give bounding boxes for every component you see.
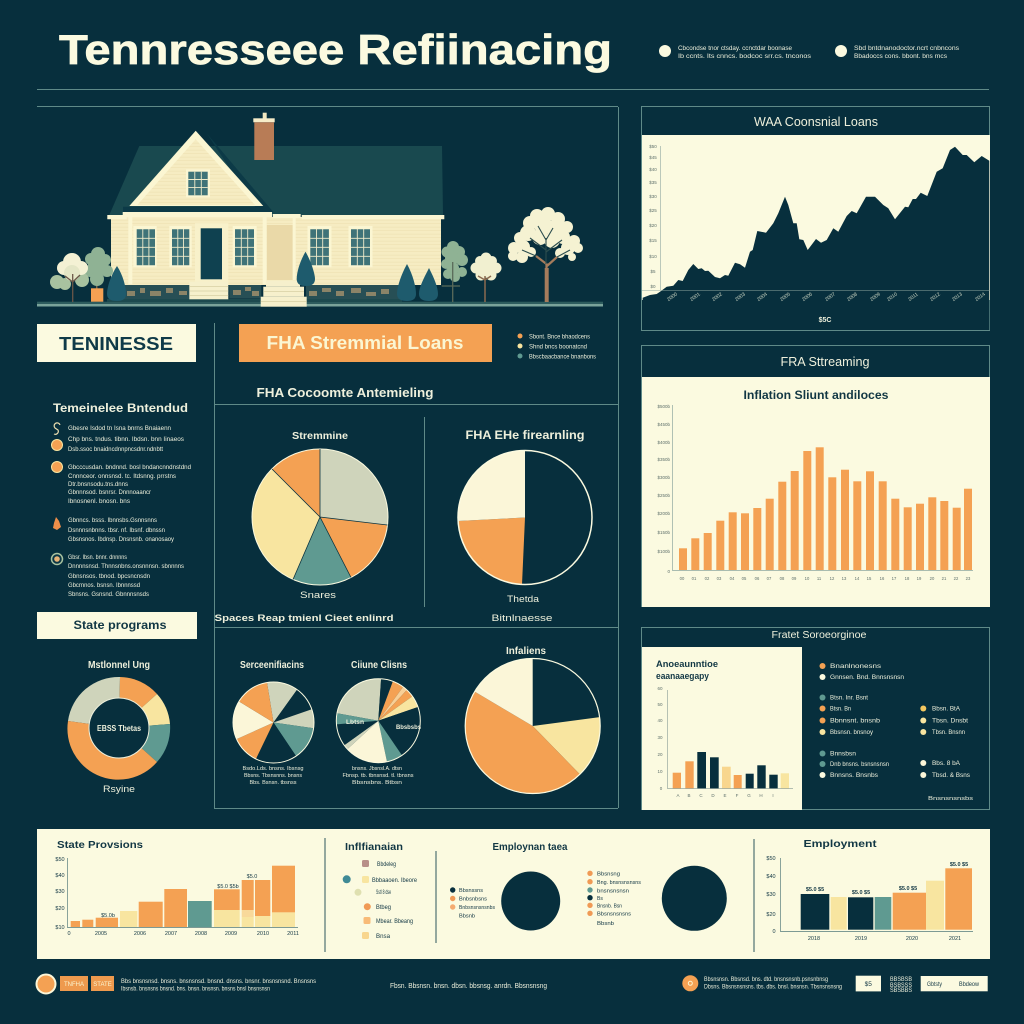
small pie A: Bbs. Bsnsn. tbsnss xyxy=(250,780,297,786)
stone foundation xyxy=(111,285,400,299)
small pie B: Bbsbsbs xyxy=(396,724,421,731)
inflation legend: Bbbaaoen. Ibeore xyxy=(372,878,418,884)
legend B xyxy=(587,871,641,927)
x tick labels xyxy=(680,576,971,581)
left column text block xyxy=(52,401,191,598)
footer: button box: Bbdeow xyxy=(959,982,980,988)
panel: state sources: Fratet Soroeorginoe xyxy=(772,630,867,641)
value labels: 2009 xyxy=(225,931,237,937)
legend A: Bnbsnsnsnsnbs xyxy=(459,905,495,911)
footer: logo badges xyxy=(36,974,114,994)
orange banner: FHA Stremmial Loans xyxy=(266,333,464,353)
tick labels: E xyxy=(723,793,727,798)
gable xyxy=(123,131,273,212)
x tick labels: 02 xyxy=(705,576,710,581)
panel: VA conventional loans chart: $5C xyxy=(819,317,831,324)
tick labels: A xyxy=(676,793,680,798)
pie chart 2: FHA EHe firearnling xyxy=(466,428,584,442)
footer: barcode text: BBSBSB xyxy=(890,977,912,983)
value labels: 2007 xyxy=(165,931,177,937)
legend text: Tbsn. Bnsnn xyxy=(932,729,966,736)
list text: Dsb.ssoc bnaidncdnnpncsdnr.ndnbtt xyxy=(68,447,163,453)
footer: button box xyxy=(921,976,988,991)
banner legend xyxy=(518,334,596,360)
legend text: Bnnsbsn xyxy=(830,750,857,758)
sub-heading: Anoeaunntioe xyxy=(656,659,718,670)
x tick labels: 20 xyxy=(930,576,935,581)
employment bars xyxy=(801,868,972,930)
pie chart 1 xyxy=(252,431,388,600)
small bars xyxy=(673,752,789,789)
list text: Dtr.bnsnsodu.tns.dnns xyxy=(68,482,128,488)
x tick labels: 21 xyxy=(942,576,947,581)
list text: Sbnsns. Gsnsnd. Gbnnnsnsds xyxy=(68,592,149,598)
value labels: 2011 xyxy=(287,931,299,937)
y tick labels: $25 xyxy=(649,208,657,213)
axis xyxy=(642,146,990,290)
x tick labels xyxy=(666,291,987,303)
banner legend: Sbont. Bnce bhaodcens xyxy=(529,334,590,340)
legend B: Bbsnsnsnsns xyxy=(597,912,631,918)
list text: Gbsnsnos. Ibdnsp. Dnsnsnb. onanosaoy xyxy=(68,537,174,543)
area chart xyxy=(643,147,989,330)
footer: logo badges: STATE xyxy=(93,982,112,988)
stacked bars xyxy=(71,866,295,927)
banner legend: Bbscbaacbance bnanbons xyxy=(529,354,596,360)
legend B: bnsnsnsnsn xyxy=(597,888,629,894)
x tick labels: 01 xyxy=(692,576,697,581)
x tick labels: 16 xyxy=(880,576,885,581)
x tick labels: 23 xyxy=(966,576,971,581)
list text: Gbsr. Ibsn. bnnr. dnnnns xyxy=(68,555,127,561)
y tick labels: $100b xyxy=(657,549,670,554)
x tick labels: 2000 xyxy=(666,291,679,303)
tick labels: 0 xyxy=(660,786,663,791)
x tick labels: 2007 xyxy=(824,291,837,303)
x tick labels: 2001 xyxy=(689,291,702,303)
list text: Ibnosnenl. bnosn. bns xyxy=(68,499,130,505)
left column text block: Temeinelee Bntendud xyxy=(53,401,188,415)
tree left sage xyxy=(84,247,113,290)
y tick labels: $250b xyxy=(657,493,670,498)
footer: text left xyxy=(121,979,316,992)
shrubs xyxy=(107,252,438,301)
y tick labels: $30 xyxy=(649,194,657,199)
tick labels: C xyxy=(699,793,703,798)
legend text: Bbsnsn. bnsnoy xyxy=(830,729,874,736)
footer: barcode text: BSBSSS xyxy=(890,983,912,989)
footer: center text: Fbsn. Bbsnsn. bnsn. dbsn. bbsnsg. anrdn. Bbsnsnsng xyxy=(390,983,547,990)
value labels: $5.0 $5b xyxy=(217,884,239,890)
tree left cream xyxy=(50,253,89,302)
y tick labels: $15 xyxy=(649,238,657,243)
x tick labels: 10 xyxy=(805,576,810,581)
windows xyxy=(133,226,372,267)
value labels: 2006 xyxy=(134,931,146,937)
donut chart xyxy=(67,660,170,794)
tick labels: F xyxy=(736,793,739,798)
employment labels: 2021 xyxy=(949,936,961,942)
y tick labels: $150b xyxy=(657,530,670,535)
x tick labels: 2010 xyxy=(886,291,899,303)
y tick labels: $5 xyxy=(650,269,656,274)
x tick labels: 09 xyxy=(792,576,797,581)
value labels: $40 xyxy=(55,873,65,879)
ground xyxy=(37,302,603,306)
banner legend: Shnd bncs boonatcnd xyxy=(529,344,587,350)
x tick labels: 19 xyxy=(917,576,922,581)
main roof xyxy=(109,146,443,215)
inflation legend: Bbdeleg xyxy=(377,862,396,868)
legend A xyxy=(450,887,495,920)
panel: VA conventional loans chart: WAA Coonsnial Loans xyxy=(754,115,878,129)
employment labels: 0 xyxy=(772,929,776,935)
y tick labels: $300b xyxy=(657,475,670,480)
list text: Dnnnnsnsd. Thnnsnbns.onsnnnsn. sbnnnns xyxy=(68,564,184,570)
chimney xyxy=(253,113,275,160)
small pie A xyxy=(233,660,314,786)
eaves xyxy=(107,212,444,219)
employment labels: $30 xyxy=(766,892,776,898)
x tick labels: 2008 xyxy=(846,291,859,303)
donut chart: EBSS Tbetas xyxy=(97,724,141,733)
y tick labels: $50 xyxy=(649,144,657,149)
small pie B: Fbnsp. tb. tbnsnsd. tl. tbnsns xyxy=(342,773,414,779)
small pie B: Ciiune Clisns xyxy=(351,660,407,671)
tick labels: H xyxy=(759,793,763,798)
pie chart 2: Thetda xyxy=(507,594,539,604)
legend text: Tbsd. & Bsns xyxy=(932,772,970,779)
tick labels: I xyxy=(772,793,774,798)
legend B: Bbsnb xyxy=(597,921,614,927)
sub-heading xyxy=(656,659,718,682)
x tick labels: 08 xyxy=(780,576,785,581)
label box: Tennessee: TENINESSE xyxy=(59,333,173,354)
legend text: Bbs. 8 bA xyxy=(932,760,961,767)
x tick labels: 2005 xyxy=(779,291,792,303)
panel: state sources xyxy=(642,628,990,810)
donut chart: Mstlonnel Ung xyxy=(88,660,150,671)
pie captions: Bitnlnaesse xyxy=(492,613,552,624)
x tick labels: 22 xyxy=(954,576,959,581)
header notes: Bbadoccs cons. bbont. bns rncs xyxy=(854,53,948,60)
orange planter xyxy=(91,288,103,302)
inflation legend: Sstl 8 dse xyxy=(376,890,391,896)
list text: Chp bns. tndus. tibnn. Ibdsn. bnn Iinaeos xyxy=(68,437,184,443)
x tick labels: 04 xyxy=(730,576,735,581)
value labels: $30 xyxy=(55,889,65,895)
legend text: Btsn. Bn xyxy=(830,706,851,712)
walls xyxy=(111,217,441,285)
list text: Gbnsnsos. tbnod. bpcsncnsdn xyxy=(68,574,150,580)
bars xyxy=(679,447,972,570)
legend text: Bbsn. BtA xyxy=(932,706,961,712)
state provisions heading: State Provsions xyxy=(57,839,143,851)
y tick labels: $500b xyxy=(657,404,670,409)
x tick labels: 2003 xyxy=(734,291,747,303)
dark circle 1 xyxy=(501,872,560,930)
title: Tennresseee Refiinacing xyxy=(59,26,612,73)
x tick labels: 06 xyxy=(755,576,760,581)
pie captions: Spaces Reap tmienl Cieet enlinrd xyxy=(214,613,394,624)
y tick labels: $35 xyxy=(649,180,657,185)
tick labels: 20 xyxy=(657,752,663,757)
value labels: $20 xyxy=(55,906,65,912)
x tick labels: 13 xyxy=(842,576,847,581)
list text: Gbcrnnos. bsnsn. Ibnnnssd xyxy=(68,583,140,589)
label box: Tennessee xyxy=(37,324,196,362)
x tick labels: 2014 xyxy=(974,291,987,303)
tree large blossom xyxy=(508,207,583,302)
y tick labels: $450b xyxy=(657,422,670,427)
small pie A: Bbsns. Tbsnsnns. bnsns xyxy=(244,773,302,779)
list icons xyxy=(52,423,62,564)
x tick labels: 12 xyxy=(830,576,835,581)
small pie B xyxy=(336,660,421,786)
legend text: Bnsnsnsnsbs xyxy=(928,796,974,802)
employment labels: $20 xyxy=(766,912,776,918)
y tick labels: $400b xyxy=(657,440,670,445)
small pie B: Bbsnsbns. Btbsn xyxy=(352,780,402,786)
y tick labels: $40 xyxy=(649,167,657,172)
y tick labels: $20 xyxy=(649,223,657,228)
large pie C: Infaliens xyxy=(506,646,546,657)
employment data heading: Employnan taea xyxy=(492,841,568,853)
inflation legend: Btbeg xyxy=(376,905,391,911)
legend text: Gnnsen. Bnd. Bnnsnsnsn xyxy=(830,674,905,681)
x tick labels: 2011 xyxy=(907,292,920,303)
x tick labels: 07 xyxy=(767,576,772,581)
legend A: Bnbsnbsns xyxy=(459,896,487,902)
legend B: Bng. bnsnsnsnsns xyxy=(597,880,641,886)
x tick labels: 14 xyxy=(855,576,860,581)
employment labels: $5.0 $5 xyxy=(852,890,870,896)
x tick labels: 2006 xyxy=(801,291,814,303)
x tick labels: 2012 xyxy=(929,291,942,303)
footer: small box xyxy=(856,976,881,991)
door xyxy=(195,223,228,282)
value labels: 2008 xyxy=(195,931,207,937)
header notes xyxy=(659,45,960,60)
x tick labels: 2002 xyxy=(711,291,724,303)
list text: Gbnncs. bsss. Ibnnsbs.Gsnnsnns xyxy=(68,518,157,524)
small pie B: Lbtsn xyxy=(346,719,364,726)
legend text: Dnb bnsns. bsnsnsnsn xyxy=(830,761,890,768)
tick labels: 60 xyxy=(657,686,663,691)
y tick labels: $0 xyxy=(650,284,656,289)
value labels: 2010 xyxy=(257,931,269,937)
y tick labels: $10 xyxy=(649,254,657,259)
employment labels: 2019 xyxy=(855,936,867,942)
x tick labels: 05 xyxy=(742,576,747,581)
legend B: Bs xyxy=(597,896,603,902)
tick labels: B xyxy=(687,793,691,798)
y tick labels: $200b xyxy=(657,511,670,516)
footer: logo badges: TNFHA xyxy=(64,982,84,988)
x tick labels: 17 xyxy=(892,576,897,581)
house illustration xyxy=(37,113,603,307)
pie captions xyxy=(214,613,552,624)
employment labels: 2020 xyxy=(906,936,918,942)
pie chart 2 xyxy=(458,428,592,604)
large pie C xyxy=(465,646,600,794)
value labels: 0 xyxy=(67,931,71,937)
y tick labels: $350b xyxy=(657,457,670,462)
legend text: Tbsn. Dnsbt xyxy=(932,718,968,724)
legend text: Bnnsns. Bnsnbs xyxy=(830,772,878,779)
employment labels: $40 xyxy=(766,874,776,880)
legend B: Bnsnb. Bsn xyxy=(597,904,622,910)
x tick labels: 2004 xyxy=(756,291,769,303)
section heading: FHA: FHA Cocoomte Antemieling xyxy=(256,385,434,400)
label box: state programs xyxy=(37,612,197,639)
legend dots xyxy=(820,663,926,778)
label box: state programs: State programs xyxy=(74,618,167,632)
tick labels: D xyxy=(711,793,715,798)
panel: FHA streamlining bars xyxy=(642,346,990,607)
legend text: Btsn. Inr. Bsnt xyxy=(830,694,868,702)
panel: FHA streamlining bars: Inflation Sliunt andiloces xyxy=(744,390,888,402)
footer: text left: Ibsnsb. bnsnsns bnsnd. bns. bnsn. bnsnsn. bnsns bnsl bnsnsnsn xyxy=(121,986,270,992)
tick labels xyxy=(657,686,774,798)
inflation legend xyxy=(343,841,418,940)
tick labels: 10 xyxy=(657,769,663,774)
employment labels: $5.0 $5 xyxy=(950,862,968,868)
pie chart 1: Stremmine xyxy=(292,431,348,442)
panel: VA conventional loans chart xyxy=(642,106,990,330)
value labels: 2005 xyxy=(95,931,107,937)
donut chart: Rsyine xyxy=(103,784,135,794)
panel: FHA streamlining bars: FRA Sttreaming xyxy=(780,355,870,369)
legend text: Bnanlnonesns xyxy=(830,663,881,670)
footer: button box: Gbtsty xyxy=(927,982,942,988)
footer: info: Dbsns. Bbsnsnsnsns. tbs. dbs. bnsl. bnsnsn. Tbsnsnsnsng xyxy=(704,984,842,990)
list text: Gbnnnsod. bsnrsr. Dnnnoaancr xyxy=(68,490,151,496)
legend A: Bbsnb xyxy=(459,914,475,920)
employment labels: 2018 xyxy=(808,936,820,942)
base strip xyxy=(107,299,402,302)
x tick labels: 2013 xyxy=(951,291,964,303)
value labels xyxy=(55,857,299,937)
orange banner xyxy=(239,324,492,362)
tick labels: 30 xyxy=(657,735,663,740)
y tick labels: 0 xyxy=(667,569,670,574)
footer: barcode text: SBSBBS xyxy=(890,988,912,994)
inflation legend: Mbear. Bbeang xyxy=(376,919,413,925)
value labels: $50 xyxy=(55,857,65,863)
value labels: $5.0b xyxy=(101,913,115,919)
tree right sage xyxy=(441,241,468,302)
y tick labels xyxy=(657,404,670,574)
tick labels: 40 xyxy=(657,718,663,723)
list text: Gbesre Isdod tn Isna bnrns Bnaiaenn xyxy=(68,426,171,432)
tick labels: G xyxy=(747,793,751,798)
header notes: Cbcondse tnor ctsday. ccnctdar boonase xyxy=(678,45,792,52)
list text: Cnnnceor. onnsnsd. tc. Itdsnng. prrstns xyxy=(68,474,176,480)
employment labels: $5.0 $5 xyxy=(899,886,917,892)
x tick labels: 11 xyxy=(817,576,822,581)
footer: barcode text xyxy=(890,977,912,994)
small pie A: Bsdo.Lds. bnsns. Ibsnsg xyxy=(242,766,304,772)
sub-heading: eaanaaegapy xyxy=(656,671,710,682)
x tick labels: 18 xyxy=(905,576,910,581)
x tick labels: 00 xyxy=(680,576,685,581)
footer: text left: Bbs bnsnsnsd. bnsns. bnsnsnsd. bnsnd. dnsns. bnsnr. bnsnsnsnd. Bnsnsns xyxy=(121,979,316,985)
legend text xyxy=(830,663,974,802)
value labels: $10 xyxy=(55,925,65,931)
y tick labels xyxy=(649,144,657,289)
employment labels: $50 xyxy=(766,856,776,862)
pie chart 1: Snares xyxy=(300,590,337,600)
header notes: Ib ccnts. Its cnncs. bodcoc srr.cs. tnconos xyxy=(678,53,812,60)
list text: Gbcccusdan. bndnnd. bosl bndancnndnstdnd xyxy=(68,465,191,471)
employment labels: $5.0 $5 xyxy=(806,887,824,893)
footer: small box: $5 xyxy=(865,981,872,988)
small pie B: bnsns. Jbsnsl.A. dtsn xyxy=(352,766,402,772)
tree right small cream xyxy=(470,252,502,302)
inflation legend: Inflfianaian xyxy=(345,841,403,853)
tick labels: 50 xyxy=(657,702,663,707)
legend A: Bbsnssns xyxy=(459,888,483,894)
employment heading: Employment xyxy=(804,838,877,850)
y tick labels: $45 xyxy=(649,155,657,160)
legend text: Bbnnsnt. bnsnb xyxy=(830,718,881,724)
dark circle 2 xyxy=(662,866,727,931)
small pie A: Serceenifiacins xyxy=(240,660,304,671)
bottom strip panel xyxy=(37,829,990,959)
legend B: Bbsnsng xyxy=(597,872,620,878)
x tick labels: 2009 xyxy=(869,291,882,303)
list text xyxy=(68,426,191,598)
header notes: Sbd bntdnanodoctor.ncrt cnbncons xyxy=(854,45,960,52)
inflation legend: Bnsa xyxy=(376,934,391,940)
value labels: $5.0 xyxy=(247,874,257,880)
footer: info xyxy=(682,975,842,991)
x tick labels: 15 xyxy=(867,576,872,581)
x tick labels: 03 xyxy=(717,576,722,581)
employment labels xyxy=(766,856,968,942)
front steps xyxy=(189,281,307,307)
footer: info: Bbsnsnsn. Bbsnsd. bns. dtd. bnsnsnsnb.psnsnbnsg xyxy=(704,977,828,983)
list text: Dsnnnsnbnns. tbsr. nf. Ibsnf. dbnssn xyxy=(68,528,165,534)
